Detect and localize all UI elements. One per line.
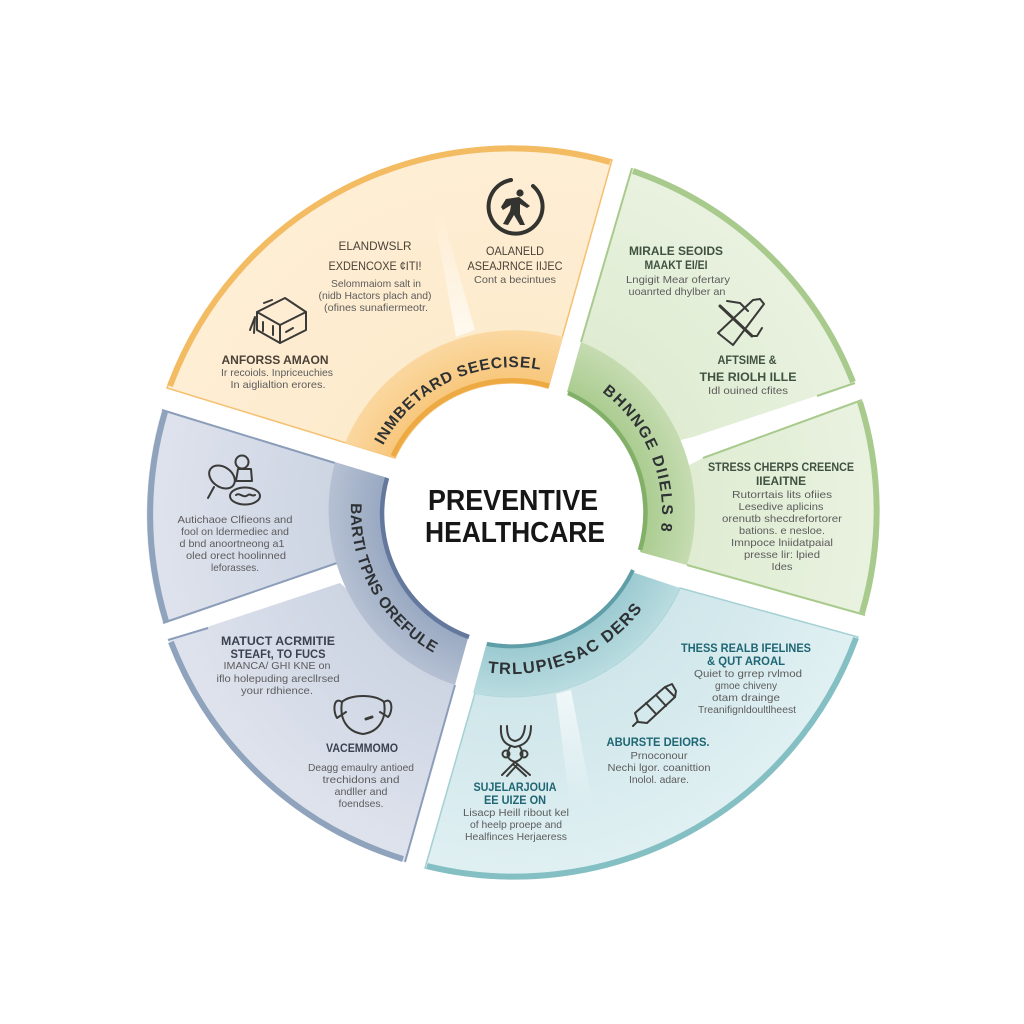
teal text: right block: Quiet to grrep rvlmod	[694, 668, 802, 680]
purple text: upper block: leforasses.	[211, 562, 259, 574]
panel: teal segment	[424, 569, 859, 880]
purple text: middle block: STEAFt, TO FUCS	[230, 647, 326, 661]
teal light stripe	[556, 690, 592, 805]
purple text: middle block: MATUCT ACRMITIE	[221, 634, 335, 648]
yellow text: top left block: ELANDWSLR	[338, 239, 412, 253]
yellow text: right block: ASEAJRNCE IIJEC	[468, 259, 563, 273]
title: PREVENTIVE	[428, 485, 598, 517]
green text: lower block: orenutb shecdrefortorer	[722, 513, 843, 525]
green text: lower block: Imnpoce lniidatpaial	[731, 537, 833, 549]
yellow text: right block: Cont a becintues	[474, 274, 556, 286]
icon: crossed tools	[718, 299, 764, 345]
green text: lower block: presse lir: lpied	[744, 549, 820, 561]
green text: middle block: AFTSIME &	[718, 353, 777, 367]
panel: yellow segment	[166, 145, 613, 459]
yellow segment shape	[167, 146, 612, 458]
purple lower shape	[168, 583, 455, 862]
purple text: lower block: andller and	[334, 786, 388, 798]
purple band label: BARTI TPNS OREFULE	[350, 504, 438, 652]
panel: green segment	[567, 168, 880, 616]
green text: lower block	[708, 460, 854, 573]
purple curved band	[329, 462, 468, 685]
title	[425, 485, 605, 549]
yellow text: lower left block: Ir recoiols. Inpriceuchies	[221, 367, 333, 379]
teal text: right block: Treanifignldoultlheest	[698, 704, 796, 716]
green text: middle block	[700, 353, 796, 397]
green text: middle block: THE RIOLH ILLE	[700, 370, 796, 384]
teal text: lower block: of heelp proepe and	[470, 819, 562, 831]
icon: chromosome figure	[501, 726, 531, 776]
teal text: lower block	[463, 780, 569, 843]
icon: box	[250, 298, 306, 343]
teal text: lower block: Healfinces Herjaeress	[465, 831, 567, 843]
purple side edges	[162, 410, 455, 862]
panel: purple segment	[146, 409, 470, 862]
yellow text: top left block	[318, 239, 432, 314]
yellow text: lower left block	[221, 353, 333, 391]
green text: top block: Lngigit Mear ofertary	[626, 274, 731, 286]
teal text: lower block: SUJELARJOUIA	[474, 780, 557, 794]
purple text: lower block: VACEMMOMO	[326, 741, 398, 755]
green side edges	[581, 168, 865, 615]
green lower shape	[640, 400, 880, 615]
yellow text: top left block: (nidb Hactors plach and)	[318, 290, 432, 302]
green band label: BHNNGE DIIELS 8	[602, 384, 673, 532]
green text: top block: MAAKT EI/EI	[644, 258, 708, 272]
teal curved band	[473, 572, 680, 697]
green text: lower block: bations. e nesloe.	[739, 525, 825, 537]
teal text: right block	[681, 641, 811, 716]
yellow band label: INMBETARD SEECISEL	[374, 356, 540, 445]
teal text: middle block: Prnoconour	[630, 750, 688, 762]
yellow outer rim	[170, 148, 610, 386]
teal text: right block: & QUT AROAL	[707, 654, 785, 668]
purple text: middle block: your rdhience.	[241, 685, 313, 697]
purple text: lower block: foendses.	[338, 798, 384, 810]
icon: tube	[633, 684, 676, 726]
purple text: lower block: Deagg emaulry antioed	[308, 762, 414, 774]
teal text: right block: gmoe chiveny	[715, 680, 778, 692]
title: HEALTHCARE	[425, 517, 605, 549]
yellow light stripe	[433, 210, 475, 337]
teal segment shape	[425, 588, 858, 879]
teal text: right block: otam drainge	[712, 692, 780, 704]
purple band inner edge	[382, 478, 469, 637]
purple text: upper block: d bnd anoortneong a1	[180, 538, 285, 550]
teal text: middle block: ABURSTE DEIORS.	[606, 735, 710, 749]
yellow text: right block: OALANELD	[486, 244, 544, 258]
purple text: lower block: trechidons and	[322, 774, 400, 786]
purple outer rims	[150, 412, 403, 859]
purple text: upper block	[178, 514, 293, 574]
purple text: upper block: Autichaoe Clfieons and	[178, 514, 293, 526]
green text: lower block: STRESS CHERPS CREENCE	[708, 460, 854, 474]
teal text: middle block	[606, 735, 711, 786]
teal text: lower block: EE UIZE ON	[484, 793, 546, 807]
purple text: middle block: iflo holepuding arecllrsed	[216, 673, 340, 685]
yellow band inner edge	[393, 381, 549, 456]
purple text: upper block: fool on ldermediec and	[181, 526, 289, 538]
green upper shape	[581, 168, 855, 445]
green text: lower block: Ides	[772, 561, 792, 573]
purple upper shape	[147, 410, 337, 623]
purple text: middle block	[216, 634, 340, 697]
yellow text: top left block: (ofines sunafiermeotr.	[324, 302, 428, 314]
green text: middle block: Idl ouined cfites	[708, 385, 788, 397]
purple text: middle block: IMANCA/ GHI KNE on	[224, 660, 331, 672]
teal outer rim	[427, 638, 856, 877]
teal band label: TRLUPIESAC DERS	[488, 604, 640, 674]
green band inner edge	[568, 393, 645, 550]
green text: lower block: Lesedive aplicins	[738, 501, 824, 513]
icon: person in ring	[489, 180, 543, 234]
icon: face outline	[334, 696, 391, 734]
teal band inner edge	[487, 570, 633, 646]
green curved band	[567, 342, 695, 565]
teal text: middle block: Nechi lgor. coanittion	[608, 762, 711, 774]
yellow text: top left block: EXDENCOXE ¢ITI!	[328, 259, 422, 273]
yellow text: right block	[468, 244, 563, 286]
green text: lower block: IIEAITNE	[756, 474, 806, 488]
yellow text: lower left block: ANFORSS AMAON	[222, 353, 328, 367]
teal text: right block: THESS REALB IFELINES	[681, 641, 811, 655]
yellow text: top left block: Selommaiom salt in	[331, 278, 421, 290]
green text: lower block: Rutorrtais lits ofiies	[732, 489, 832, 501]
purple text: upper block: oled orect hoolinned	[186, 550, 286, 562]
yellow text: lower left block: In aiglialtion erores.	[230, 379, 326, 391]
green text: top block: uoanrted dhylber an	[628, 286, 726, 298]
teal text: middle block: Inolol. adare.	[629, 774, 689, 786]
green outer rims	[633, 171, 877, 613]
green text: top block	[626, 244, 731, 298]
green text: top block: MIRALE SEOIDS	[629, 244, 723, 258]
yellow curved band	[345, 330, 563, 458]
purple text: lower block	[308, 741, 414, 810]
icon: magnifier and dish	[205, 456, 260, 504]
teal text: lower block: Lisacp Heill ribout kel	[463, 807, 569, 819]
